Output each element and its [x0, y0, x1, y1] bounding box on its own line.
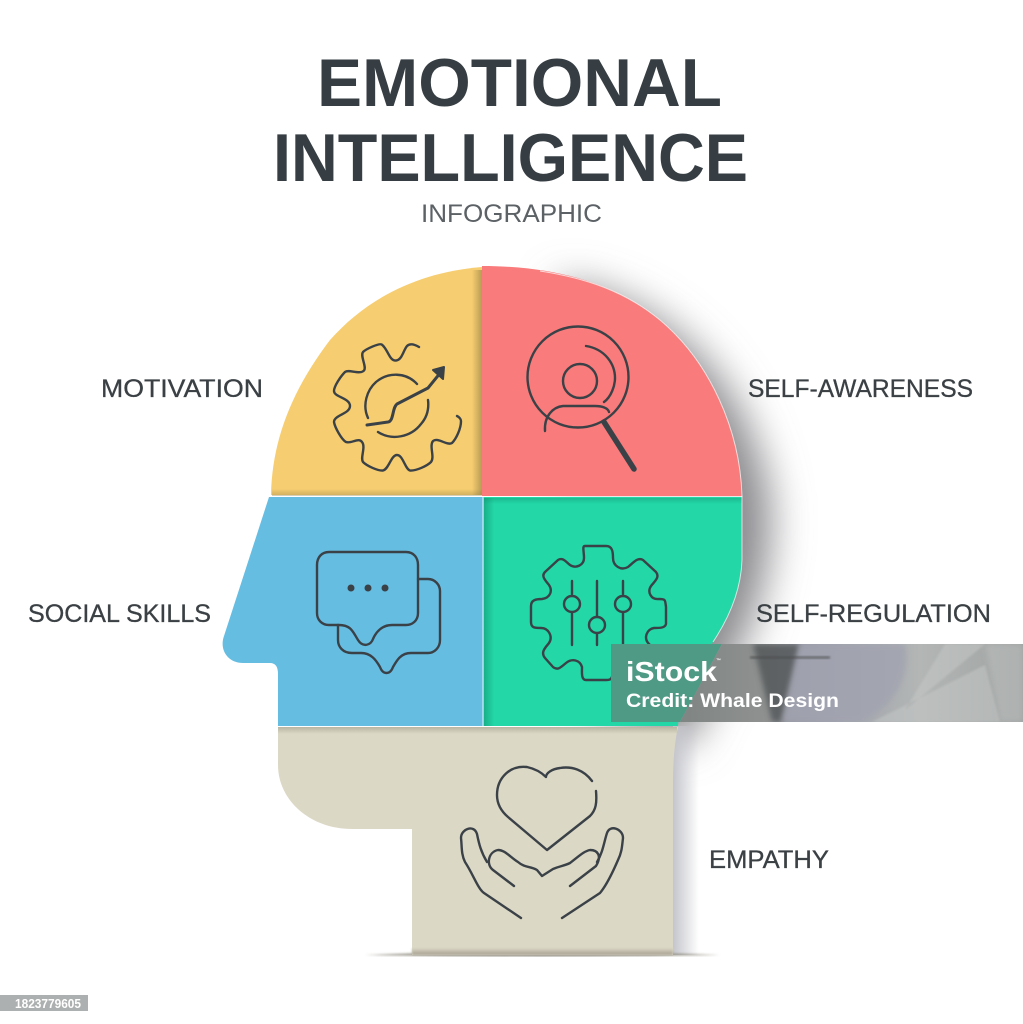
icon: speech bubbles — [317, 552, 440, 673]
head diagram — [223, 266, 742, 955]
panel: self-awareness — [482, 266, 742, 496]
icon: person in magnifying glass — [528, 326, 634, 469]
subtitle: INFOGRAPHIC — [421, 200, 602, 228]
watermark text — [626, 656, 839, 712]
title — [273, 45, 748, 196]
title: INTELLIGENCE — [273, 120, 748, 196]
image id badge: 1823779605 — [15, 997, 81, 1011]
panel: motivation — [271, 267, 482, 495]
label: social skills: SOCIAL SKILLS — [28, 600, 211, 628]
icon: gear with rising arrow — [334, 344, 461, 471]
watermark text: iStock — [626, 656, 717, 687]
head shadow — [365, 282, 771, 956]
image id badge — [0, 995, 88, 1011]
label: motivation: MOTIVATION — [101, 375, 263, 403]
panel: self-regulation — [483, 497, 742, 726]
panel: social skills — [223, 497, 483, 726]
label: empathy: EMPATHY — [709, 846, 829, 874]
watermark text: ™ — [716, 658, 721, 664]
watermark — [611, 644, 1023, 722]
icon: gear with sliders — [531, 546, 666, 680]
label: self-awareness: SELF-AWARENESS — [748, 375, 973, 403]
label: self-regulation: SELF-REGULATION — [756, 600, 991, 628]
watermark text: Credit: Whale Design — [626, 691, 839, 712]
panel: empathy — [278, 727, 678, 955]
panel seams — [272, 270, 742, 955]
icon: heart in hands — [461, 767, 623, 918]
title: EMOTIONAL — [317, 45, 722, 121]
